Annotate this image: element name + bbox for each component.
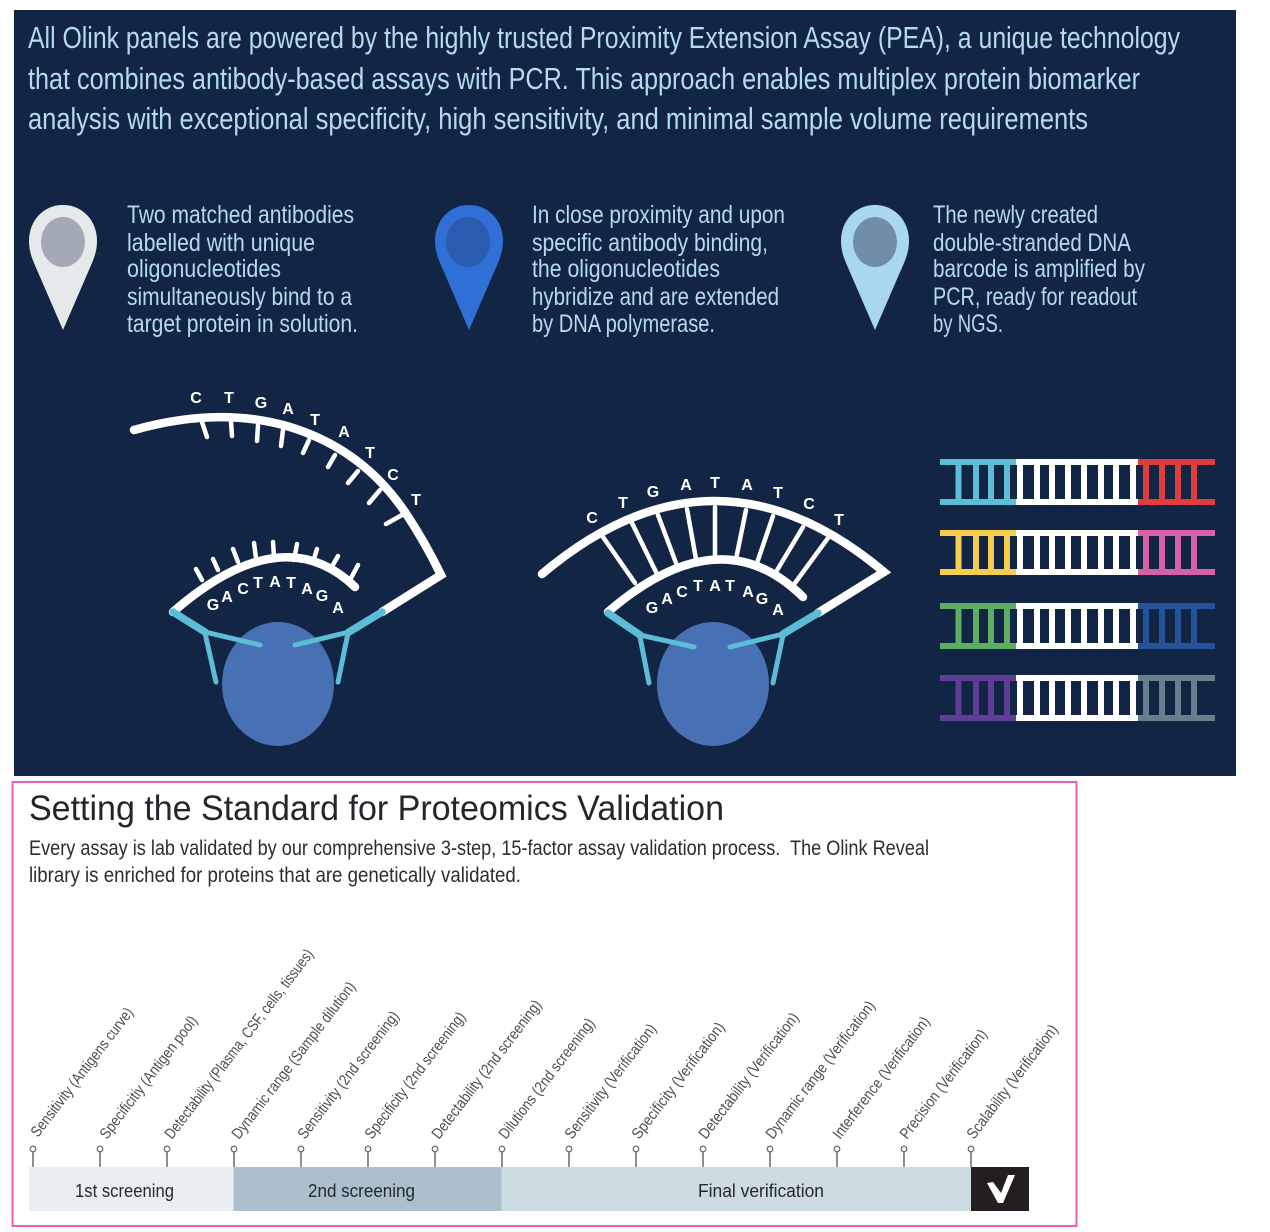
lower oligonucleotide strand	[173, 557, 355, 612]
rotated validation factor labels: Sensitivity (Verification)	[562, 1021, 660, 1142]
rotated validation factor labels: Scalability (Verification)	[964, 1022, 1062, 1142]
step 2 text: hybridize and are extended	[532, 283, 779, 311]
upper sequence letters: T	[773, 485, 783, 502]
upper sequence letters: C	[803, 496, 815, 513]
upper sequence letters: G	[255, 395, 267, 412]
section description: Every assay is lab validated by our comprehensive 3-step, 15-factor assay validation process. The Olink Reveal	[29, 837, 929, 860]
step 3 text: barcode is amplified by	[933, 255, 1145, 283]
lower sequence letters: T	[725, 578, 735, 595]
upper sequence letters: T	[710, 475, 720, 492]
left antibody	[173, 612, 260, 682]
timeline pins	[30, 1146, 974, 1167]
lower sequence letters: T	[286, 575, 296, 592]
lower sequence letters: A	[709, 578, 721, 595]
lower sequence letters: G	[756, 591, 768, 608]
step 3 text	[933, 201, 1145, 338]
upper sequence letters: T	[310, 412, 320, 429]
upper sequence letters: T	[365, 445, 375, 462]
step 2 text: by DNA polymerase.	[532, 310, 715, 338]
step 1 text: target protein in solution.	[127, 310, 358, 338]
upper sequence letters: A	[338, 424, 350, 441]
upper sequence letters: C	[586, 510, 598, 527]
protein	[657, 622, 769, 746]
step 3 text: double-stranded DNA	[933, 229, 1131, 257]
barcode row 2	[940, 533, 1215, 572]
lower sequence letters: G	[207, 597, 219, 614]
section description: library is enriched for proteins that are genetically validated.	[29, 864, 521, 887]
lower sequence letters: C	[676, 584, 688, 601]
panel: PEA technology	[14, 10, 1236, 776]
rotated validation factor labels: Dilutions (2nd screening)	[496, 1015, 598, 1142]
lower sequence letters: A	[661, 591, 673, 608]
step 1 text: labelled with unique	[127, 229, 315, 257]
upper sequence letters	[586, 475, 844, 529]
left antibody	[608, 613, 694, 683]
icon: blue map pin	[435, 205, 503, 330]
stage: 1st screening: 1st screening	[75, 1180, 174, 1201]
section title: Setting the Standard for Proteomics Validation	[29, 789, 724, 828]
upper sequence letters	[190, 390, 421, 509]
icon: grey map pin	[29, 205, 97, 330]
hybridized rungs	[603, 507, 828, 583]
step 1 text: Two matched antibodies	[127, 201, 354, 229]
rotated validation factor labels: Specificity (Verification)	[629, 1019, 728, 1142]
upper sequence letters: A	[680, 477, 692, 494]
rotated validation factor labels: Specificity (2nd screening)	[362, 1009, 469, 1142]
upper sequence letters: T	[411, 492, 421, 509]
step 2 text	[532, 201, 785, 338]
stage: 2nd screening: 2nd screening	[308, 1180, 415, 1201]
upper sequence letters: G	[647, 484, 659, 501]
section description	[29, 837, 929, 887]
lower sequence letters	[207, 574, 344, 617]
lower sequence letters: A	[269, 574, 281, 591]
upper sequence letters: A	[741, 477, 753, 494]
rotated validation factor labels: Dynamic range (Sample dilution)	[229, 979, 359, 1142]
lower sequence letters: G	[316, 588, 328, 605]
upper sequence letters: T	[834, 512, 844, 529]
icon: validated check mark	[971, 1167, 1029, 1211]
rotated validation factor labels: Detectability (Plasma, CSF, cells, tissues)	[162, 946, 317, 1142]
rotated validation factor labels: Sensitivity (2nd screening)	[295, 1008, 403, 1142]
stage: 2nd screening	[234, 1167, 502, 1211]
upper sequence letters: T	[224, 390, 234, 407]
rotated validation factor labels	[28, 946, 1062, 1142]
step 1 text: oligonucleotides	[127, 255, 281, 283]
rotated validation factor labels: Precision (Verification)	[897, 1026, 991, 1142]
stage: final verification: Final verification	[698, 1180, 824, 1201]
intro text	[28, 20, 1180, 136]
lower sequence letters: G	[646, 600, 658, 617]
step 3 text: by NGS.	[933, 310, 1003, 338]
lower sequence letters: A	[742, 584, 754, 601]
step 1 text	[127, 201, 358, 338]
lower sequence letters: A	[332, 600, 344, 617]
lower sequence letters: A	[301, 581, 313, 598]
right antibody	[730, 613, 818, 683]
rotated validation factor labels: Detectability (Verification)	[696, 1010, 803, 1142]
step 2 text: In close proximity and upon	[532, 201, 785, 229]
step 2 text: the oligonucleotides	[532, 255, 720, 283]
lower sequence letters: T	[253, 575, 263, 592]
upper sequence letters: T	[618, 495, 628, 512]
barcode row 4	[940, 678, 1215, 718]
barcode row 1	[940, 462, 1215, 502]
diagram: amplified DNA barcodes	[940, 462, 1215, 718]
protein	[222, 622, 334, 746]
panel: proteomics validation	[12, 782, 1076, 1226]
stage: 1st screening	[29, 1167, 234, 1211]
step 1 text: simultaneously bind to a	[127, 283, 352, 311]
rotated validation factor labels: Specificitiy (Antigen pool)	[97, 1013, 201, 1142]
rotated validation factor labels: Dynamic range (Verification)	[763, 998, 879, 1142]
stage: final verification	[502, 1167, 971, 1211]
lower sequence letters: A	[221, 589, 233, 606]
lower strand	[608, 559, 803, 612]
diagram: hybridized strands extended by polymerase	[542, 475, 884, 746]
lower sequence letters: A	[772, 602, 784, 619]
upper sequence letters: A	[282, 401, 294, 418]
upper strand	[542, 501, 884, 613]
step 3 text: The newly created	[933, 201, 1098, 229]
upper oligonucleotide strand	[134, 417, 441, 612]
barcode row 3	[940, 606, 1215, 646]
rotated validation factor labels: Interference (Verification)	[830, 1014, 934, 1142]
lower strand ticks	[196, 542, 358, 580]
lower sequence letters: C	[237, 581, 249, 598]
lower sequence letters	[646, 578, 784, 619]
lower sequence letters: T	[693, 578, 703, 595]
rotated validation factor labels: Sensitivity (Antigens curve)	[28, 1005, 137, 1140]
step 2 text: specific antibody binding,	[532, 229, 768, 257]
upper strand ticks	[202, 422, 402, 524]
upper sequence letters: C	[387, 467, 399, 484]
rotated validation factor labels: Detectability (2nd screening)	[429, 997, 545, 1142]
step 3 text: PCR, ready for readout	[933, 283, 1137, 311]
upper sequence letters: C	[190, 390, 202, 407]
diagram: antibodies binding target protein	[134, 390, 441, 746]
right antibody	[295, 612, 382, 682]
icon: light blue map pin	[841, 205, 909, 330]
